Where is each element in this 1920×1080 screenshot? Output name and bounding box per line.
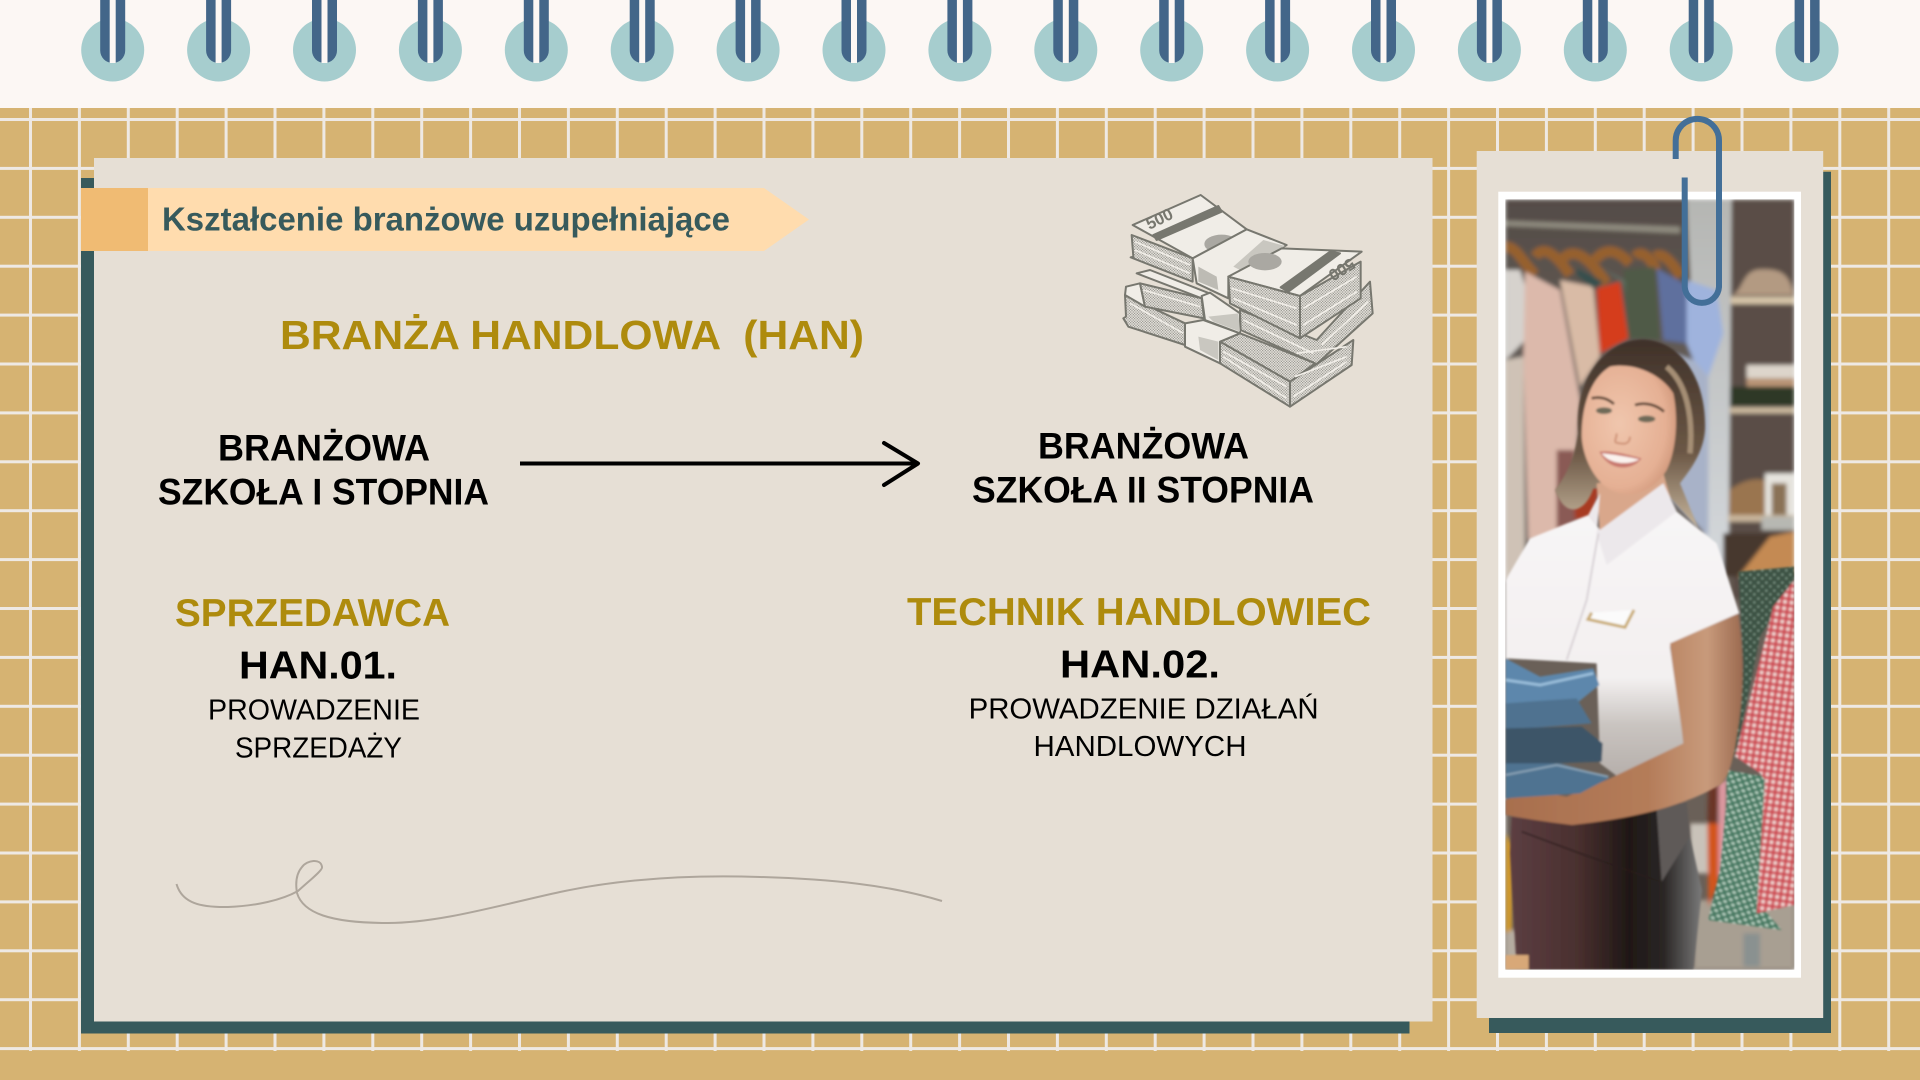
shirt xyxy=(1506,483,1739,778)
arm and hand xyxy=(1506,613,1743,825)
text block: salesperson qualification xyxy=(175,592,450,764)
heading ribbon: Kształcenie branżowe uzupełniające xyxy=(162,200,730,238)
text block: salesperson qualification: HAN.01. xyxy=(239,644,397,688)
arrow xyxy=(520,443,918,485)
text block: second-degree school: SZKOŁA II STOPNIA xyxy=(972,469,1314,510)
panel: photo card xyxy=(1477,151,1831,1033)
icon: paperclip xyxy=(1676,119,1719,303)
text block: salesperson qualification: PROWADZENIE xyxy=(208,694,420,726)
text block: sales technician qualification: HAN.02. xyxy=(1060,644,1220,686)
heading: trade sector: BRANŻA HANDLOWA (HAN) xyxy=(280,312,864,358)
text block: first-degree school xyxy=(158,427,489,512)
jeans xyxy=(1506,658,1599,707)
text block: sales technician qualification: HANDLOWYCH xyxy=(1034,731,1246,763)
neck and hair xyxy=(1555,339,1705,528)
decorative flourish line xyxy=(176,861,942,923)
photo: saleswoman in a clothing store xyxy=(1505,199,1794,970)
text block: first-degree school: BRANŻOWA xyxy=(218,427,430,468)
text block: sales technician qualification: PROWADZENIE DZIAŁAŃ xyxy=(969,692,1319,725)
icon: stack of banknotes xyxy=(1123,195,1373,407)
text block: first-degree school: SZKOŁA I STOPNIA xyxy=(158,471,489,512)
lower background: dresses and floor xyxy=(1693,900,1794,970)
heading ribbon xyxy=(81,188,809,251)
panel: main content sheet xyxy=(81,158,1432,1034)
text block: sales technician qualification xyxy=(907,591,1371,763)
icon: stack of banknotes: 500 xyxy=(1143,204,1176,234)
skirt xyxy=(1510,802,1702,970)
icon: stack of banknotes: 500 xyxy=(1325,254,1359,285)
text block: second-degree school: BRANŻOWA xyxy=(1038,425,1249,466)
text block: salesperson qualification: SPRZEDAWCA xyxy=(175,592,450,635)
text block: salesperson qualification: SPRZEDAŻY xyxy=(235,732,402,764)
notebook top strip with spiral binding xyxy=(0,0,1920,108)
text block: second-degree school xyxy=(972,425,1314,510)
name badge xyxy=(1588,610,1634,627)
text block: sales technician qualification: TECHNIK HANDLOWIEC xyxy=(907,591,1371,634)
